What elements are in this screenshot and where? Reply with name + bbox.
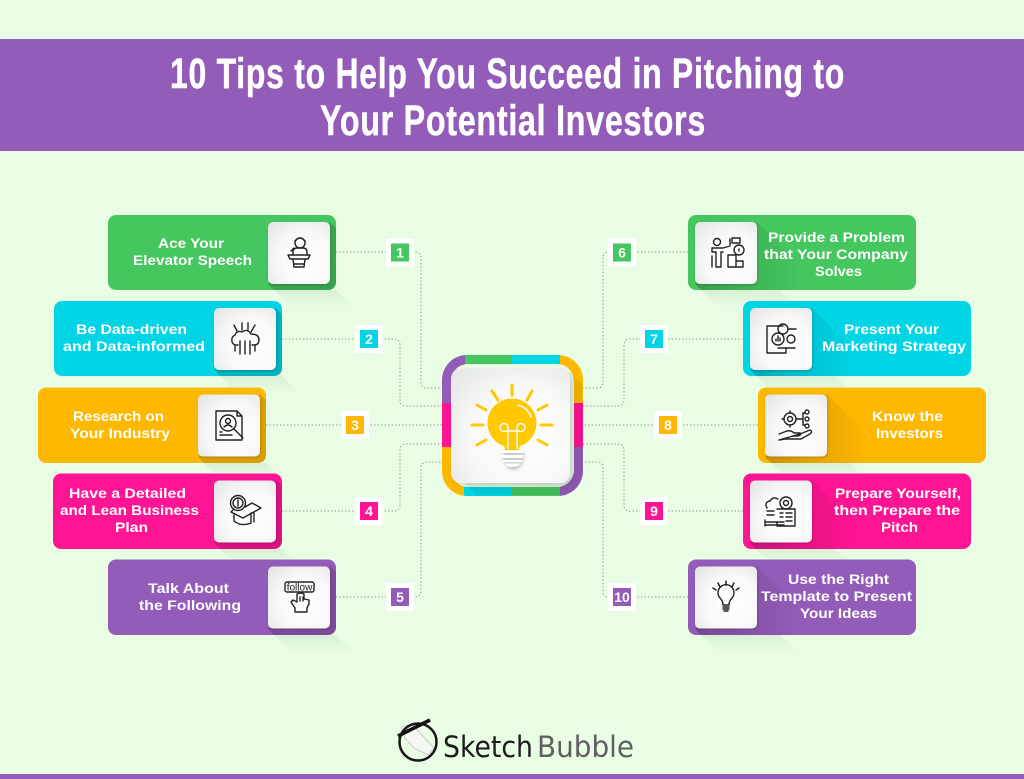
- central light bulb emblem: [442, 355, 583, 496]
- card 1: Ace Your Elevator Speech: Elevator Speech: [133, 252, 252, 268]
- badge 7: [640, 325, 668, 353]
- dotted connectors: [266, 252, 758, 597]
- card 4: Have a Detailed and Lean Business Plan: Plan: [115, 519, 148, 535]
- card 10: Use the Right Template to Present Your Ideas: Use the Right: [788, 571, 889, 587]
- card 6: Provide a Problem that Your Company Solves: Provide a Problem: [768, 229, 905, 245]
- badge 1: [386, 238, 414, 266]
- card 10: Use the Right Template to Present Your Ideas: [688, 560, 916, 653]
- badge 2: 2: [365, 331, 373, 347]
- card 10: Use the Right Template to Present Your Ideas: Your Ideas: [800, 605, 877, 621]
- badge 10: 10: [614, 589, 630, 605]
- icon: glowing bulb: [472, 385, 552, 467]
- badge 5: [386, 583, 414, 611]
- title banner: [0, 39, 1024, 151]
- card 7: Present Your Marketing Strategy: Present Your: [844, 321, 940, 337]
- multicolour frame: [442, 355, 583, 496]
- card 1: Ace Your Elevator Speech: [108, 215, 354, 308]
- icon: follow button with hand: [285, 582, 314, 612]
- card 4: Have a Detailed and Lean Business Plan: Have a Detailed: [69, 485, 186, 501]
- card 9: Prepare Yourself, then Prepare the Pitch: Prepare Yourself,: [835, 485, 961, 501]
- logo: SketchBubble: Sketch: [443, 730, 533, 764]
- card 6: Provide a Problem that Your Company Solves: [688, 215, 916, 308]
- icon: gear network over hand: [779, 410, 812, 440]
- badge 10: [608, 583, 636, 611]
- card 4: Have a Detailed and Lean Business Plan: [53, 474, 300, 567]
- icon: follow button with hand: follow: [287, 582, 313, 594]
- logo: SketchBubble: Bubble: [537, 730, 634, 764]
- card 2: Be Data-driven and Data-informed: and Data-informed: [63, 338, 205, 354]
- card 5: Talk About the Following: [108, 560, 354, 653]
- icon: light bulb outline: [713, 581, 739, 611]
- logo icon: [398, 720, 436, 760]
- icon: clipboard with gears and chart: [767, 324, 796, 353]
- card 7: Present Your Marketing Strategy: Marketing Strategy: [822, 338, 966, 354]
- icon: person with problem boxes: [712, 238, 744, 267]
- card 7: Present Your Marketing Strategy: [743, 301, 971, 394]
- badge 8: 8: [664, 417, 672, 433]
- card 10: Use the Right Template to Present Your Ideas: Template to Present: [761, 588, 912, 604]
- badge 9: [640, 497, 668, 525]
- badge 1: 1: [396, 244, 404, 260]
- card 4: Have a Detailed and Lean Business Plan: and Lean Business: [60, 502, 199, 518]
- bottom bar: [0, 774, 1024, 779]
- card 2: Be Data-driven and Data-informed: Be Data-driven: [76, 321, 187, 337]
- icon: document with magnifier: [216, 411, 243, 440]
- card 1: Ace Your Elevator Speech: Ace Your: [158, 235, 225, 251]
- icon: cloud circuit: [232, 323, 259, 354]
- title text: [170, 50, 845, 145]
- badge 7: 7: [650, 331, 658, 347]
- badge 2: [355, 325, 383, 353]
- logo: SketchBubble: [398, 720, 634, 764]
- center tile: [451, 368, 570, 483]
- badge 4: [355, 497, 383, 525]
- icon: speaker at lectern: [288, 238, 310, 267]
- title text: Your Potential Investors: [320, 97, 706, 145]
- card 9: Prepare Yourself, then Prepare the Pitch: Pitch: [881, 519, 918, 535]
- bulb base: [502, 450, 523, 467]
- badge 6: 6: [618, 244, 626, 260]
- card 8: Know the Investors: Know the: [872, 408, 943, 424]
- card 8: Know the Investors: [758, 388, 986, 481]
- card 3: Research on Your Industry: [38, 388, 284, 481]
- badge 3: 3: [351, 417, 359, 433]
- badge 6: [608, 238, 636, 266]
- card 3: Research on Your Industry: Your Industry: [70, 425, 170, 441]
- card 5: Talk About the Following: Talk About: [148, 580, 229, 596]
- badge 3: [341, 411, 369, 439]
- card 5: Talk About the Following: the Following: [139, 597, 241, 613]
- card 9: Prepare Yourself, then Prepare the Pitch: then Prepare the: [834, 502, 960, 518]
- badge 8: [654, 411, 682, 439]
- badge 5: 5: [396, 589, 404, 605]
- badge 4: 4: [365, 503, 373, 519]
- card 6: Provide a Problem that Your Company Solves: Solves: [815, 263, 862, 279]
- card 9: Prepare Yourself, then Prepare the Pitch: [743, 474, 971, 567]
- card 3: Research on Your Industry: Research on: [73, 408, 164, 424]
- card 8: Know the Investors: Investors: [876, 425, 943, 441]
- icon: graduation cap with coin: [230, 496, 261, 525]
- badge 9: 9: [650, 503, 658, 519]
- card 2: Be Data-driven and Data-informed: [54, 301, 300, 394]
- icon: cloud, gear and checklist: [765, 497, 795, 526]
- card 6: Provide a Problem that Your Company Solves: that Your Company: [764, 246, 908, 262]
